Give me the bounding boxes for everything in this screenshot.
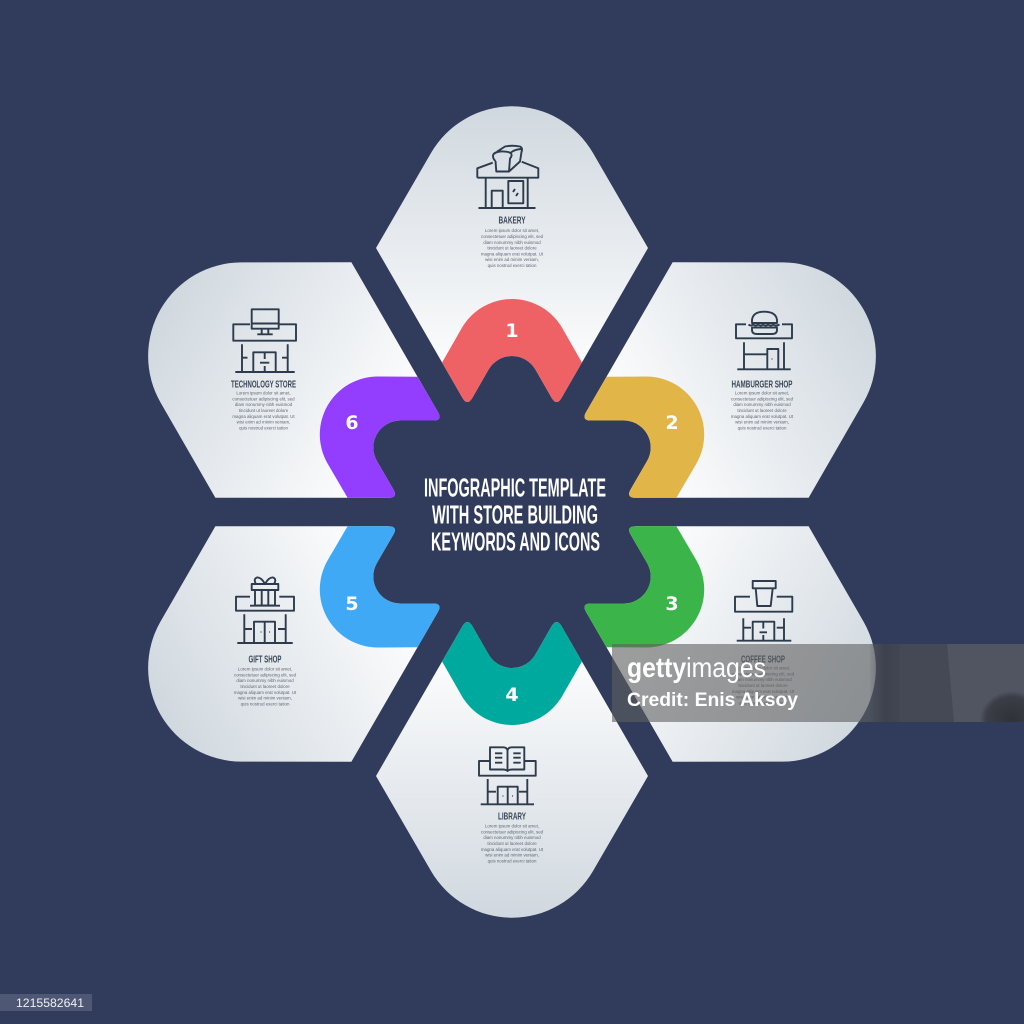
text block: gift shop: wisi enim ad minim veniam,	[238, 696, 292, 701]
image id tag	[0, 994, 92, 1011]
step arch 4	[442, 622, 582, 725]
text block: library: quis nostrud exerci tation	[488, 858, 537, 863]
text block: technology store: magna aliquam erat volutpat. Ut	[232, 414, 295, 419]
text block: bakery: consectetuer adipiscing elit, sed	[481, 234, 544, 239]
text block: coffee shop: wisi enim ad minim veniam,	[736, 695, 790, 700]
text block: bakery: Lorem ipsum dolor sit amet,	[485, 228, 539, 233]
text block: coffee shop: diam nonummy nibh euismod	[734, 677, 792, 682]
text block: gift shop: diam nonummy nibh euismod	[236, 678, 294, 683]
text block: bakery: quis nostrud exerci tation	[488, 263, 537, 268]
text block: coffee shop: magna aliquam erat volutpat. Ut	[732, 689, 795, 694]
text block: technology store: quis nostrud exerci tation	[239, 425, 288, 430]
title: WITH STORE BUILDING	[432, 500, 598, 530]
heading: hamburger shop: HAMBURGER SHOP	[732, 380, 793, 391]
text block: library: wisi enim ad minim veniam,	[485, 853, 539, 858]
icon: hamburger shop	[736, 312, 792, 369]
image id tag: 1215582641	[16, 996, 84, 1010]
panel: library	[376, 622, 648, 918]
text block: gift shop: tincidunt ut laoreet dolore	[240, 684, 290, 689]
step arch 3	[572, 506, 731, 679]
text block: technology store: diam nonummy nibh euismod	[235, 402, 293, 407]
text block: gift shop: consectetuer adipiscing elit, sed	[234, 672, 297, 677]
heading: library: LIBRARY	[498, 812, 526, 823]
text block: bakery: wisi enim ad minim veniam,	[485, 257, 539, 262]
title: INFOGRAPHIC TEMPLATE	[424, 472, 606, 502]
text block: bakery: magna aliquam erat volutpat. Ut	[481, 251, 544, 256]
panel: hamburger shop	[539, 191, 931, 575]
text block: gift shop: quis nostrud exerci tation	[241, 701, 290, 706]
text block: coffee shop: consectetuer adipiscing elit, sed	[732, 671, 795, 676]
text block: technology store: consectetuer adipiscing elit, sed	[232, 396, 295, 401]
step arch 1	[442, 299, 582, 402]
heading: coffee shop: COFFEE SHOP	[741, 654, 785, 665]
text block: coffee shop: Lorem ipsum dolor sit amet,	[736, 666, 790, 671]
number 3: 3	[665, 593, 679, 615]
text block: library: tincidunt ut laoreet dolore	[487, 841, 537, 846]
text block: hamburger shop: tincidunt ut laoreet dolore	[737, 408, 787, 413]
text block: hamburger shop: consectetuer adipiscing elit, sed	[731, 396, 794, 401]
text block: library: consectetuer adipiscing elit, sed	[481, 829, 544, 834]
icon: gift shop	[236, 577, 294, 643]
step arch 5	[293, 506, 452, 679]
text block: hamburger shop: magna aliquam erat volutpat. Ut	[731, 414, 794, 419]
icon: bakery store	[477, 146, 538, 208]
text block: library: Lorem ipsum dolor sit amet,	[485, 824, 539, 829]
icon: library	[479, 747, 536, 804]
text block: gift shop: magna aliquam erat volutpat. Ut	[234, 690, 297, 695]
text block: bakery: diam nonummy nibh euismod	[483, 240, 541, 245]
text block: technology store: wisi enim ad minim veniam,	[237, 420, 290, 425]
text block: hamburger shop: diam nonummy nibh euismod	[733, 402, 791, 407]
text block: hamburger shop: wisi enim ad minim veniam,	[735, 420, 789, 425]
text block: coffee shop: quis nostrud exerci tation	[739, 700, 788, 705]
text block: gift shop: Lorem ipsum dolor sit amet,	[238, 667, 292, 672]
number 5: 5	[345, 593, 359, 615]
heading: bakery: BAKERY	[498, 216, 526, 227]
number 2: 2	[665, 412, 679, 434]
number 1: 1	[505, 320, 519, 342]
text block: bakery: tincidunt ut laoreet dolore	[487, 246, 537, 251]
step arch 2	[572, 345, 731, 518]
text block: coffee shop: tincidunt ut laoreet dolore	[738, 683, 788, 688]
panel: bakery	[376, 106, 648, 402]
panel: gift shop	[93, 449, 485, 833]
text block: library: diam nonummy nibh euismod	[483, 835, 541, 840]
text block: technology store: Lorem ipsum dolor sit amet,	[236, 391, 291, 396]
title: KEYWORDS AND ICONS	[431, 526, 600, 556]
text block: hamburger shop: Lorem ipsum dolor sit amet,	[735, 391, 789, 396]
text block: technology store: tincidunt ut laoreet dolore	[239, 408, 289, 413]
number 6: 6	[345, 412, 359, 434]
text block: library: magna aliquam erat volutpat. Ut	[481, 847, 544, 852]
step arch 6	[293, 345, 452, 518]
panel: coffee shop	[539, 449, 931, 833]
title	[424, 472, 606, 556]
panel: technology store	[93, 191, 485, 575]
icon: technology store	[233, 309, 296, 372]
watermark credit: Credit: Enis Aksoy	[627, 690, 798, 711]
icon: coffee shop	[735, 581, 792, 641]
number 4: 4	[505, 684, 519, 706]
text block: hamburger shop: quis nostrud exerci tation	[738, 425, 787, 430]
watermark logo: gettyimages	[627, 652, 766, 683]
watermark band	[612, 644, 1024, 722]
heading: technology store: TECHNOLOGY STORE	[231, 380, 296, 391]
heading: gift shop: GIFT SHOP	[248, 654, 282, 665]
